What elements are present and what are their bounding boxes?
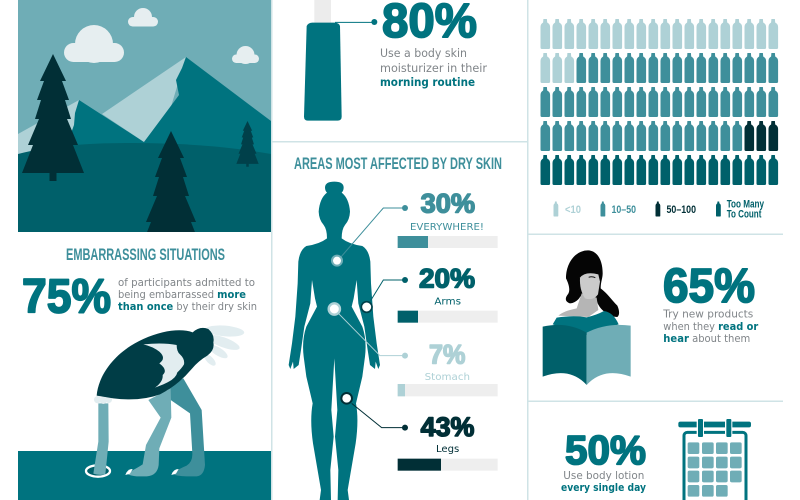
heading: embarrassing situations: EMBARRASSING SITUATIONS (66, 246, 225, 264)
ostrich illustration (86, 324, 245, 477)
eye (589, 275, 595, 279)
shoulders (553, 311, 619, 335)
book left page (543, 325, 587, 385)
bottle grid (540, 19, 778, 185)
landscape illustration (18, 0, 271, 232)
legend: too many to count: To Count (727, 208, 762, 220)
hair (566, 250, 619, 317)
front leg (126, 388, 171, 476)
text: morning routine: moisturizer in their (380, 61, 487, 75)
legend: 10 to 50 (600, 202, 636, 216)
text: every single day: every single day (561, 481, 646, 494)
mountains (18, 57, 271, 160)
text: try new products: when they read or (663, 320, 759, 333)
stat: 7% stomach: Stomach (425, 372, 470, 383)
stat: 30% everywhere (398, 189, 498, 248)
legend (554, 198, 765, 220)
stat: 43% legs (398, 412, 498, 471)
cloud small top (128, 8, 158, 26)
connector: arms (370, 280, 405, 302)
marker: stomach (329, 303, 340, 315)
cloud small right (232, 46, 259, 64)
bottle cap (314, 0, 331, 23)
stat: 30% everywhere: EVERYWHERE! (410, 222, 484, 233)
cloud large (64, 25, 124, 63)
body silhouette (289, 182, 380, 500)
text: try new products (662, 308, 759, 345)
text: morning routine: Use a body skin (380, 46, 467, 60)
stat: 20% arms: Arms (434, 297, 461, 308)
back leg (168, 378, 205, 476)
book right page (587, 325, 631, 385)
marker dots (402, 205, 408, 431)
legend: too many to count (716, 198, 765, 220)
stat: 7% stomach (398, 339, 498, 396)
stat: 20% arms (398, 264, 498, 323)
text: every single day (561, 469, 646, 494)
stat: 65%: 65% (663, 260, 755, 313)
text: try new products: Try new products (662, 308, 754, 320)
hole and neck (86, 465, 110, 477)
calendar frame (684, 432, 746, 500)
text: participants embarrassed: than once by their dry skin (118, 301, 257, 313)
calendar rods (678, 419, 751, 437)
marker: leg (341, 393, 352, 404)
text: participants embarrassed: of participants admitted to (118, 277, 255, 289)
bottle connector (335, 19, 377, 25)
stat: 7% stomach: 7% (429, 339, 465, 369)
neck (558, 293, 598, 317)
legend: under 10: <10 (565, 204, 581, 216)
legend: too many to count: Too Many (727, 198, 765, 210)
text: participants embarrassed: being embarrassed more (118, 289, 246, 301)
marker: arm (361, 302, 372, 312)
tree left (22, 54, 84, 181)
legend: 10 to 50: 10–50 (612, 204, 636, 216)
calendar icon (678, 419, 751, 500)
text: morning routine (380, 46, 487, 89)
legend: 50 to 100: 50–100 (666, 204, 696, 216)
connector: legs (352, 403, 405, 428)
pump bottle (304, 0, 377, 121)
bottle body (304, 23, 342, 121)
body (97, 328, 214, 399)
tree right (236, 121, 259, 167)
connector: stomach (338, 313, 405, 356)
stat: 43% legs: Legs (436, 444, 459, 455)
legend: under 10 (554, 202, 581, 216)
text: try new products: hear about them (663, 332, 750, 345)
stat: 75%: 75% (22, 270, 111, 324)
neck feathers (94, 396, 112, 404)
hill (18, 143, 271, 232)
claws (125, 469, 179, 475)
face (580, 273, 600, 299)
legend: 50 to 100 (656, 202, 696, 216)
tail feathers (202, 324, 245, 368)
marker: chest (332, 256, 342, 266)
woman reading illustration (543, 250, 631, 385)
body chart (289, 182, 498, 500)
stat: 43% legs: 43% (421, 412, 474, 442)
text: every single day: Use body lotion (563, 469, 644, 482)
stat: 30% everywhere: 30% (421, 189, 475, 219)
heading: areas most affected: AREAS MOST AFFECTED BY DRY SKIN (294, 154, 502, 173)
ground (18, 451, 271, 500)
stat: 50%: 50% (565, 427, 646, 473)
panel dividers (271, 0, 783, 500)
tree centre (146, 131, 196, 232)
calendar days (688, 442, 742, 497)
text: morning routine: morning routine (380, 75, 475, 89)
wing (143, 343, 184, 388)
stat: 20% arms: 20% (419, 264, 475, 294)
text: participants embarrassed (118, 277, 257, 313)
connector: everywhere (338, 208, 405, 260)
